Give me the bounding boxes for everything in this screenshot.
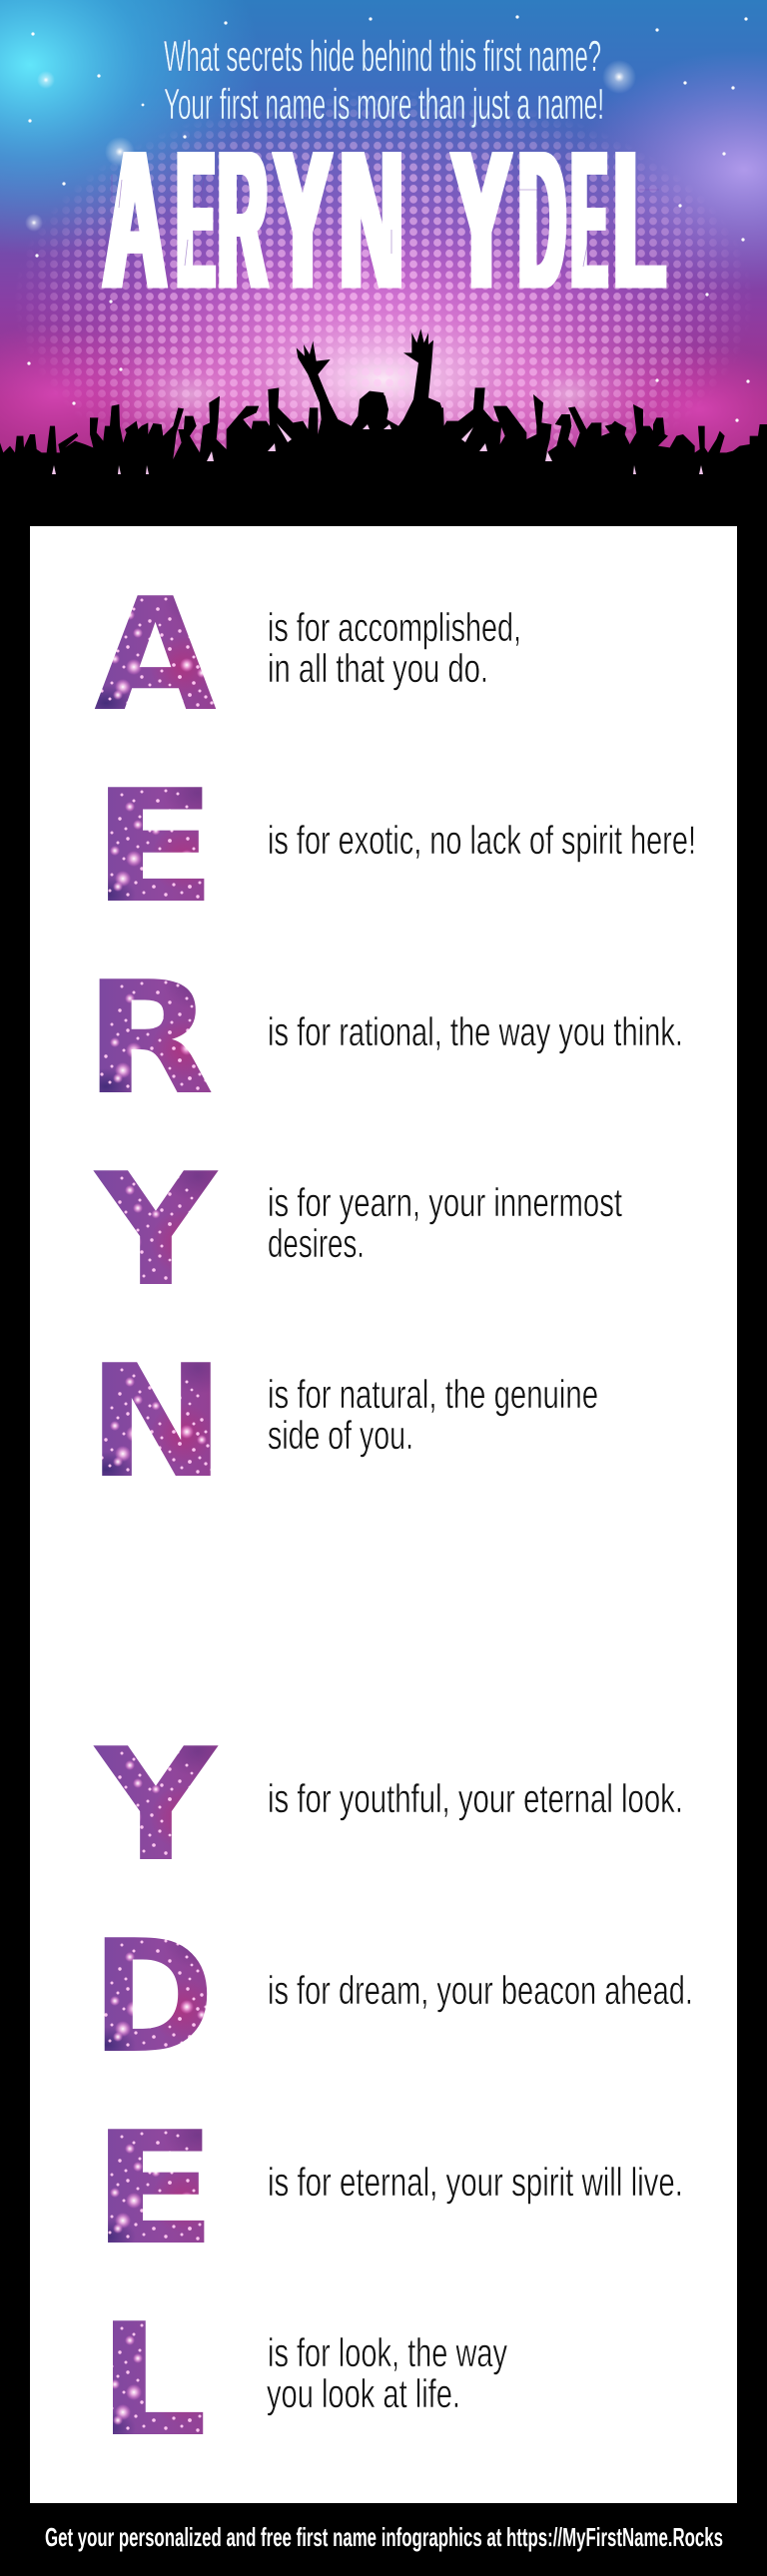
text: A meaning: is for accomplished, bbox=[268, 606, 521, 650]
row: L bbox=[97, 2289, 507, 2471]
letter L: L bbox=[97, 2289, 208, 2471]
text: N meaning: is for natural, the genuine bbox=[268, 1373, 598, 1417]
letter N: N bbox=[87, 1331, 226, 1513]
text: N meaning bbox=[268, 1373, 598, 1458]
row: R bbox=[84, 948, 683, 1129]
title: name: Y bbox=[451, 110, 511, 329]
text: L meaning: is for look, the way bbox=[268, 2331, 507, 2375]
text: Y meaning: is for yearn, your innermost bbox=[268, 1181, 622, 1225]
text: L meaning: you look at life. bbox=[267, 2372, 460, 2416]
letter A: A bbox=[94, 564, 217, 746]
row: A bbox=[94, 564, 521, 746]
header: concert stage background bbox=[0, 0, 767, 459]
row: E bbox=[91, 756, 696, 938]
title: name: E bbox=[178, 110, 214, 329]
letter Y: Y bbox=[93, 1714, 219, 1896]
row: Y bbox=[93, 1139, 622, 1321]
letter D: D bbox=[91, 1906, 215, 2088]
panel: white content card bbox=[30, 526, 737, 2503]
text: A meaning bbox=[268, 606, 521, 691]
title: name: R bbox=[219, 110, 267, 329]
letter Y: Y bbox=[93, 1139, 219, 1321]
row: D bbox=[91, 1906, 693, 2088]
text: N meaning: side of you. bbox=[268, 1414, 413, 1458]
title: name bbox=[104, 110, 665, 329]
letter E: E bbox=[91, 2098, 218, 2279]
letter R: R bbox=[84, 948, 215, 1129]
row: N bbox=[87, 1331, 598, 1513]
text: Y meaning bbox=[268, 1181, 622, 1266]
crowd silhouette bbox=[0, 328, 767, 492]
letter E: E bbox=[91, 756, 218, 938]
text: Y meaning: desires. bbox=[268, 1222, 365, 1266]
title: name: D bbox=[519, 110, 565, 329]
row: Y (second word) bbox=[93, 1714, 683, 1896]
title: name: N bbox=[340, 110, 403, 329]
title: name: A bbox=[104, 110, 166, 329]
text: A meaning: in all that you do. bbox=[268, 647, 488, 691]
text: L meaning bbox=[267, 2331, 507, 2416]
title: name: E bbox=[572, 110, 606, 329]
text: L bbox=[614, 110, 665, 329]
title: name: Y bbox=[274, 110, 332, 329]
tagline bbox=[164, 32, 604, 129]
row: E (second word) bbox=[91, 2098, 683, 2279]
